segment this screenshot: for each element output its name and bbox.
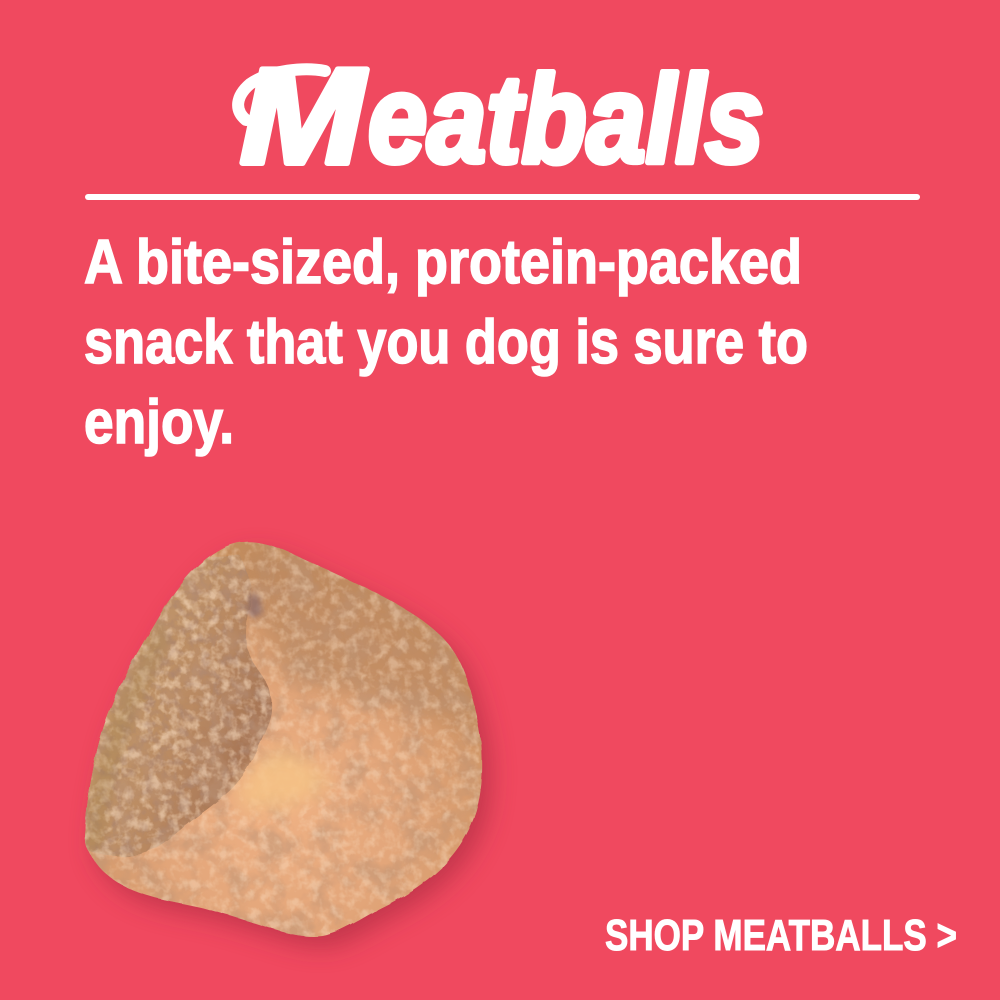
- meatball image: [60, 530, 495, 948]
- description text: snack that you dog is sure to: [84, 308, 808, 377]
- meatball shadow: [94, 553, 491, 948]
- description text: [84, 228, 808, 457]
- meatball highlight: [238, 748, 330, 809]
- title: [238, 40, 764, 192]
- meatball blotches: [80, 535, 490, 940]
- meatball grain: [80, 535, 490, 940]
- infographic panel: meatballs: [84, 63, 956, 957]
- heading divider: [85, 194, 920, 200]
- description text: A bite-sized, protein-packed: [84, 228, 802, 297]
- meatball dark spot: [247, 594, 261, 618]
- title: M: [240, 40, 367, 192]
- title: eatballs: [368, 51, 764, 189]
- description text: enjoy.: [84, 388, 234, 457]
- title swash flourish: [238, 69, 325, 120]
- meatball body: [84, 542, 482, 937]
- meatball left edge: [85, 620, 172, 850]
- meatball top shading: [258, 548, 477, 729]
- meatball darker face: [84, 554, 272, 857]
